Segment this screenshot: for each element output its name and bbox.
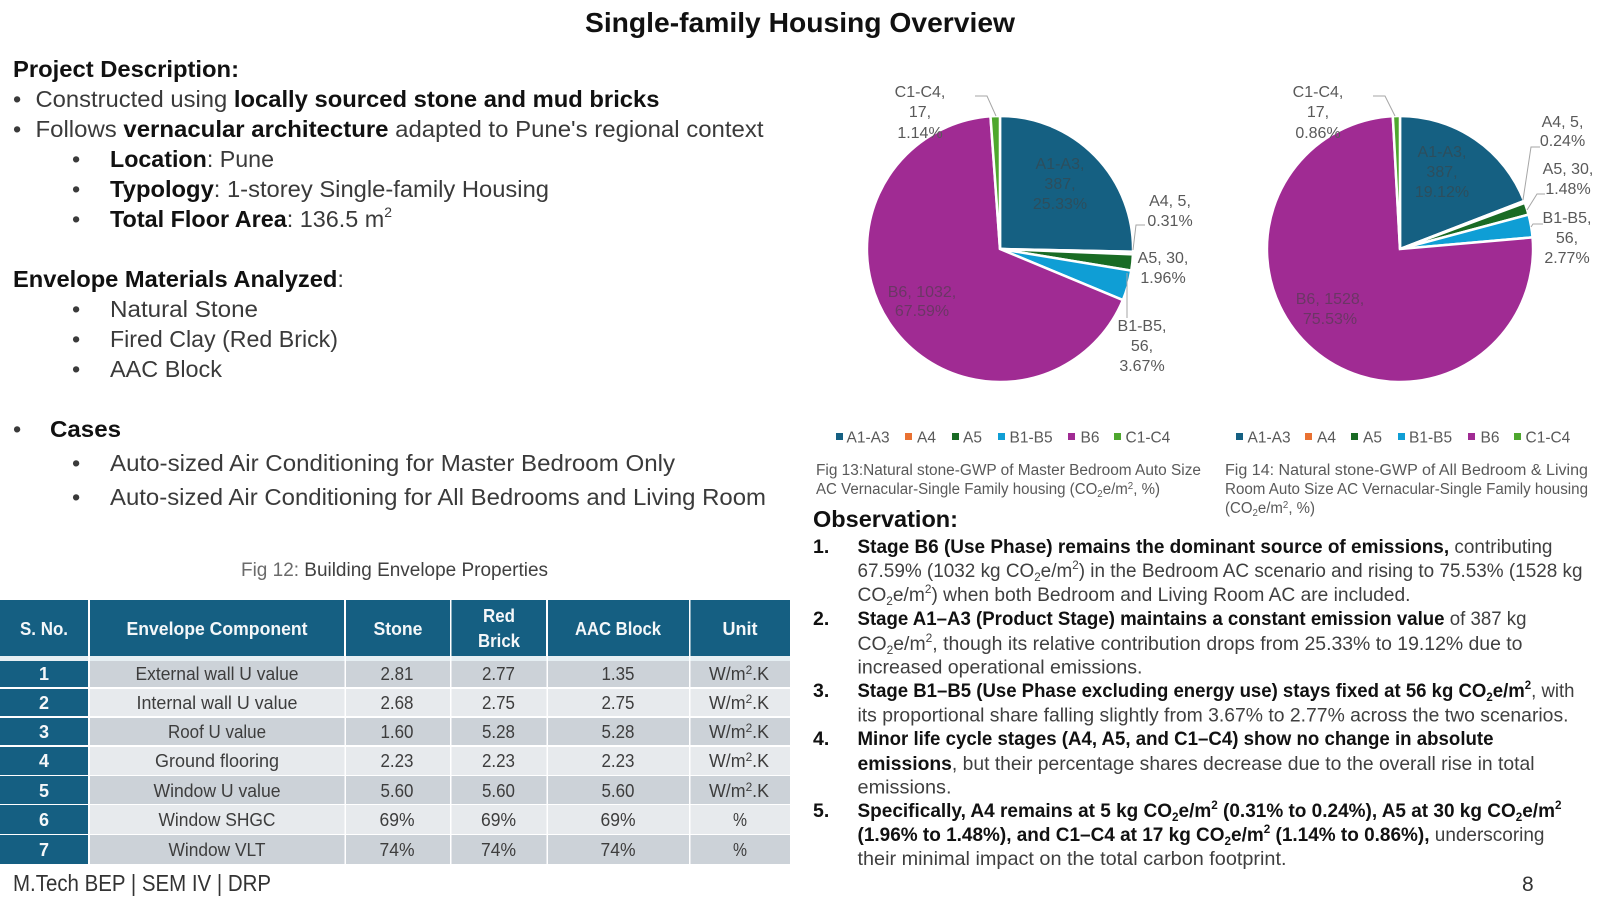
row 1: External wall U value: [136, 664, 298, 684]
legend: fig 13: B1-B5: [1010, 430, 1053, 446]
label: A4: A4, 5,: [1149, 193, 1191, 210]
row 6: 69%: [600, 810, 636, 830]
caption: fig 14: Room Auto Size AC Vernacular-Single Family housing: [1225, 481, 1588, 498]
label: A4: A4, 5,: [1542, 114, 1583, 131]
legend: fig 14: B1-B5: [1409, 430, 1452, 446]
label: A4: 0.31%: [1147, 213, 1193, 230]
label: B1-B5: B1-B5,: [1118, 318, 1166, 335]
label: A1-A3: A1-A3,: [1418, 144, 1466, 161]
caption: fig 13: Fig 13:Natural stone-GWP of Master Bedroom Auto Size: [816, 462, 1201, 479]
row 6: [0, 805, 790, 834]
row 1: [0, 661, 790, 687]
case: all bedrooms and living room: •: [72, 484, 80, 510]
label: B1-B5: 56,: [1131, 338, 1153, 355]
observation 2: [813, 608, 1526, 678]
row 4: 2.23: [482, 751, 515, 771]
row 1: 2.81: [380, 664, 414, 684]
legend: fig 14: C1-C4: [1526, 430, 1571, 446]
item: fired clay: Fired Clay (Red Brick): [110, 326, 338, 352]
panel: project description: [13, 56, 764, 232]
leader lines: [1373, 96, 1545, 227]
sub-bullet: total floor area: Total Floor Area: 136.5 m: [110, 206, 385, 232]
row 4: 2.23: [380, 751, 414, 771]
bullet: materials: •: [13, 86, 21, 112]
observation 5: (1.96% to 1.48%), and C1–C4 at 17 kg CO: [858, 824, 1225, 846]
label: C1-C4: 17,: [909, 104, 931, 121]
row 1: W/m: [709, 664, 746, 684]
pie slices: [1267, 116, 1533, 382]
observation 5: (0.31% to 0.24%), A5 at 30 kg CO: [1218, 800, 1516, 822]
row 4: 4: [39, 751, 49, 771]
observation 1: [813, 536, 1582, 608]
observation 5: their minimal impact on the total carbon footprint.: [858, 848, 1286, 870]
observation 5: [813, 798, 1562, 870]
heading: cases: Cases: [50, 416, 121, 442]
row 7: 7: [39, 840, 49, 860]
observation 3: Stage B1–B5 (Use Phase excluding energy use) stays fixed at 56 kg CO: [858, 680, 1486, 702]
row 3: Roof U value: [168, 722, 266, 742]
sub-bullet: total floor area: •: [72, 206, 80, 232]
label: B6: 75.53%: [1303, 311, 1357, 328]
legend: fig 13: A5: [963, 430, 982, 446]
item: natural stone: •: [72, 296, 80, 322]
caption: fig 13: [816, 462, 1201, 500]
row 4: 2: [746, 750, 752, 764]
observation 4: emissions.: [858, 776, 952, 798]
label: A5: 1.48%: [1545, 181, 1591, 198]
observation 1: CO: [858, 584, 887, 606]
legend: fig 13: A1-A3: [846, 430, 890, 446]
row 7: 74%: [600, 840, 636, 860]
row 6: 69%: [380, 810, 414, 830]
observation 1: 2: [1072, 558, 1079, 572]
caption: fig 13: 2: [1128, 481, 1134, 492]
label: C1-C4: C1-C4,: [895, 84, 945, 101]
observation 5: (1.14% to 0.86%),: [1270, 824, 1430, 846]
table header row: AAC Block: [575, 619, 662, 639]
row 2: 2: [746, 692, 752, 706]
caption: fig 14: 2: [1253, 508, 1258, 519]
row 1: 1.35: [602, 664, 634, 684]
observation 5: e/m: [1231, 824, 1264, 846]
legend: fig 14: A5: [1363, 430, 1382, 446]
observation 1: ) in the Bedroom AC scenario and rising to 75.53% (1528 kg: [1079, 560, 1582, 582]
observation 3: its proportional share falling slightly from 3.67% to 2.77% across the two scenarios.: [858, 704, 1568, 726]
observation 1: 2: [925, 582, 932, 596]
observation 1: e/m: [893, 584, 925, 606]
row 6: 6: [39, 810, 49, 830]
observation 5: e/m: [1522, 800, 1555, 822]
sub-bullet: location: Location: Pune: [110, 146, 274, 172]
heading: observation: Observation:: [813, 506, 958, 532]
legend: fig 14: A4: [1317, 430, 1336, 446]
label: A5: A5, 30,: [1543, 161, 1593, 178]
observation 5: 5.: [813, 800, 829, 822]
label: B1-B5: 3.67%: [1119, 358, 1165, 375]
caption: fig 13: e/m: [1103, 481, 1128, 498]
label: B1-B5: 56,: [1556, 230, 1578, 247]
pie slices: [867, 116, 1133, 382]
label: B6: B6, 1032,: [888, 284, 956, 301]
pie chart: fig 13 master bedroom: [867, 84, 1193, 382]
observation 1: Stage B6 (Use Phase) remains the dominant source of emissions, contributing: [858, 536, 1552, 558]
row 2: Internal wall U value: [136, 693, 298, 713]
row 5: 5: [39, 781, 49, 801]
panel: observation: [813, 506, 1582, 870]
observation 2: 2: [926, 631, 933, 645]
row 3: W/m: [709, 722, 746, 742]
observation 5: 2: [1516, 810, 1523, 824]
observation 2: CO: [858, 633, 887, 655]
label: A5: A5, 30,: [1138, 250, 1188, 267]
label: C1-C4: 1.14%: [897, 125, 943, 142]
observation 2: 2: [887, 643, 894, 657]
page number: 8: [1522, 873, 1534, 896]
sub-bullet: typology: Typology: 1-storey Single-family Housing: [110, 176, 549, 202]
observation 5: Specifically, A4 remains at 5 kg CO: [858, 800, 1180, 822]
caption: fig 14: , %): [1288, 500, 1315, 517]
table header row: S. No.: [20, 619, 68, 639]
row 5: Window U value: [154, 781, 280, 801]
caption: fig 12: Fig 12: Building Envelope Properties: [241, 560, 548, 581]
table header row: Brick: [478, 631, 521, 651]
pie chart: fig 14 all bedrooms and living room: [1267, 84, 1593, 382]
heading: cases: •: [13, 416, 21, 442]
sub-bullet: total floor area: 2: [384, 204, 392, 220]
table header row: [0, 600, 790, 656]
leader lines: [975, 96, 1145, 318]
observation 4: [813, 728, 1534, 798]
caption: fig 14: Fig 14: Natural stone-GWP of All Bedroom & Living: [1225, 462, 1588, 479]
label: C1-C4: 0.86%: [1295, 125, 1341, 142]
bullet: architecture: Follows vernacular architecture adapted to Pune's regional context: [36, 116, 764, 142]
row 4: Ground flooring: [155, 751, 279, 771]
row 4: W/m: [709, 751, 746, 771]
label: B6: 67.59%: [895, 303, 949, 320]
observation 4: Minor life cycle stages (A4, A5, and C1–C4) show no change in absolute: [858, 728, 1494, 750]
observation 1: ) when both Bedroom and Living Room AC are included.: [931, 584, 1410, 606]
label: A1-A3: 387,: [1044, 176, 1076, 193]
row 2: 2.68: [380, 693, 414, 713]
observation 5: 2: [1555, 798, 1562, 812]
case: master bedroom: •: [72, 450, 80, 476]
observation 5: 2: [1264, 822, 1271, 836]
row 6: %: [733, 810, 747, 830]
observation 3: , with: [1531, 680, 1574, 702]
caption: fig 14: [1225, 462, 1588, 519]
column separators: [88, 600, 690, 864]
row 3: 2: [746, 721, 752, 735]
legend: fig 13: B6: [1080, 430, 1099, 446]
row 2: .K: [752, 693, 769, 713]
sub-bullet: typology: •: [72, 176, 80, 202]
label: A1-A3: 387,: [1426, 164, 1458, 181]
row 6: 69%: [481, 810, 516, 830]
observation 5: 2: [1172, 810, 1179, 824]
observation 2: increased operational emissions.: [858, 656, 1142, 678]
legend: fig 13: A4: [917, 430, 936, 446]
observation 1: 2: [1034, 570, 1041, 584]
row 7: %: [733, 840, 747, 860]
caption: fig 14: (CO: [1225, 500, 1253, 517]
label: B6: B6, 1528,: [1296, 291, 1364, 308]
item: AAC block: •: [72, 356, 80, 382]
row 1: .K: [752, 664, 769, 684]
label: C1-C4: C1-C4,: [1293, 84, 1343, 101]
heading: envelope materials: Envelope Materials Analyzed:: [13, 266, 344, 292]
bullet: architecture: •: [13, 116, 21, 142]
row 4: [0, 747, 790, 775]
heading: cases: [13, 416, 121, 442]
observation 2: e/m: [893, 633, 926, 655]
label: B1-B5: B1-B5,: [1543, 210, 1591, 227]
row 7: [0, 835, 790, 864]
row 3: [0, 718, 790, 745]
heading: project description: Project Description:: [13, 56, 239, 82]
table header row: Envelope Component: [126, 619, 308, 639]
observation 3: 2: [1525, 678, 1531, 692]
row 7: 74%: [481, 840, 516, 860]
legend: fig 13: C1-C4: [1126, 430, 1171, 446]
label: B1-B5: 2.77%: [1544, 250, 1590, 267]
row 3: 5.28: [602, 722, 634, 742]
panel: envelope materials: [13, 266, 344, 382]
observation 2: 2.: [813, 608, 829, 630]
label: A1-A3: 25.33%: [1033, 196, 1087, 213]
row 3: .K: [752, 722, 769, 742]
row 1: 2: [746, 663, 752, 677]
observation 3: e/m: [1493, 680, 1525, 702]
caption: fig 13: AC Vernacular-Single Family housing (CO: [816, 481, 1105, 498]
row 5: 5.60: [380, 781, 414, 801]
row 7: Window VLT: [168, 840, 266, 860]
bullet: materials: Constructed using locally sourced stone and mud bricks: [36, 86, 660, 112]
row 5: W/m: [709, 781, 746, 801]
legend: fig 14: A1-A3: [1248, 430, 1291, 446]
item: AAC block: AAC Block: [110, 356, 222, 382]
case: all bedrooms and living room: Auto-sized Air Conditioning for All Bedrooms and Living Room: [110, 484, 766, 510]
caption: fig 14: e/m: [1258, 500, 1283, 517]
table header row: Red: [483, 606, 515, 626]
row 1: 2.77: [482, 664, 515, 684]
row 4: 2.23: [602, 751, 634, 771]
label: A4: 0.24%: [1540, 133, 1585, 150]
row 5: 5.60: [602, 781, 634, 801]
row 1: 1: [39, 664, 49, 684]
title: Single-family Housing Overview: [585, 7, 1015, 38]
row 5: 2: [746, 780, 752, 794]
caption: fig 13: 2: [1097, 489, 1103, 500]
observation 1: 67.59% (1032 kg CO: [858, 560, 1040, 582]
observation 2: , though its relative contribution drops from 25.33% to 19.12% due to: [932, 633, 1523, 655]
row 3: 5.28: [482, 722, 515, 742]
observation 5: underscoring: [1435, 824, 1548, 846]
row 2: 2.75: [482, 693, 515, 713]
label: C1-C4: 17,: [1307, 104, 1329, 121]
observation 3: 2: [1486, 690, 1493, 704]
row 5: [0, 776, 790, 804]
legend: fig 14: [1236, 430, 1571, 446]
case: master bedroom: Auto-sized Air Conditioning for Master Bedroom Only: [110, 450, 675, 476]
row 7: 74%: [380, 840, 414, 860]
observation 3: [813, 678, 1574, 726]
observation 3: 3.: [813, 680, 829, 702]
observation 5: e/m: [1179, 800, 1211, 822]
row 3: 3: [39, 722, 49, 742]
legend: fig 14: B6: [1480, 430, 1499, 446]
row 2: 2: [39, 693, 49, 713]
observation 1: 1.: [813, 536, 829, 558]
row 3: 1.60: [380, 722, 414, 742]
observation 5: 2: [1211, 798, 1218, 812]
observation 5: 2: [1225, 834, 1231, 848]
item: fired clay: •: [72, 326, 80, 352]
table header row: Unit: [722, 619, 758, 639]
row 2: [0, 689, 790, 716]
label: A5: 1.96%: [1140, 270, 1186, 287]
table: building envelope properties: [0, 600, 790, 864]
caption: fig 13: , %): [1133, 481, 1160, 498]
row 2: W/m: [709, 693, 746, 713]
legend: fig 13: [836, 430, 1171, 446]
observation 1: 2: [886, 594, 893, 608]
row 5: 5.60: [482, 781, 515, 801]
row 5: .K: [752, 781, 769, 801]
row 4: .K: [752, 751, 769, 771]
observation 2: Stage A1–A3 (Product Stage) maintains a constant emission value of 387 kg: [858, 608, 1526, 630]
observation 4: emissions, but their percentage shares decrease due to the overall rise in total: [858, 753, 1534, 775]
footer text: M.Tech BEP | SEM IV | DRP: [13, 870, 271, 896]
table header row: Stone: [374, 619, 422, 639]
label: A1-A3: A1-A3,: [1036, 156, 1084, 173]
observation 1: e/m: [1041, 560, 1072, 582]
panel: cases: [13, 416, 766, 510]
label: A1-A3: 19.12%: [1415, 184, 1469, 201]
row 6: Window SHGC: [158, 810, 276, 830]
caption: fig 14: 2: [1283, 500, 1289, 511]
sub-bullet: location: •: [72, 146, 80, 172]
row 2: 2.75: [602, 693, 634, 713]
observation 4: 4.: [813, 728, 829, 750]
item: natural stone: Natural Stone: [110, 296, 258, 322]
